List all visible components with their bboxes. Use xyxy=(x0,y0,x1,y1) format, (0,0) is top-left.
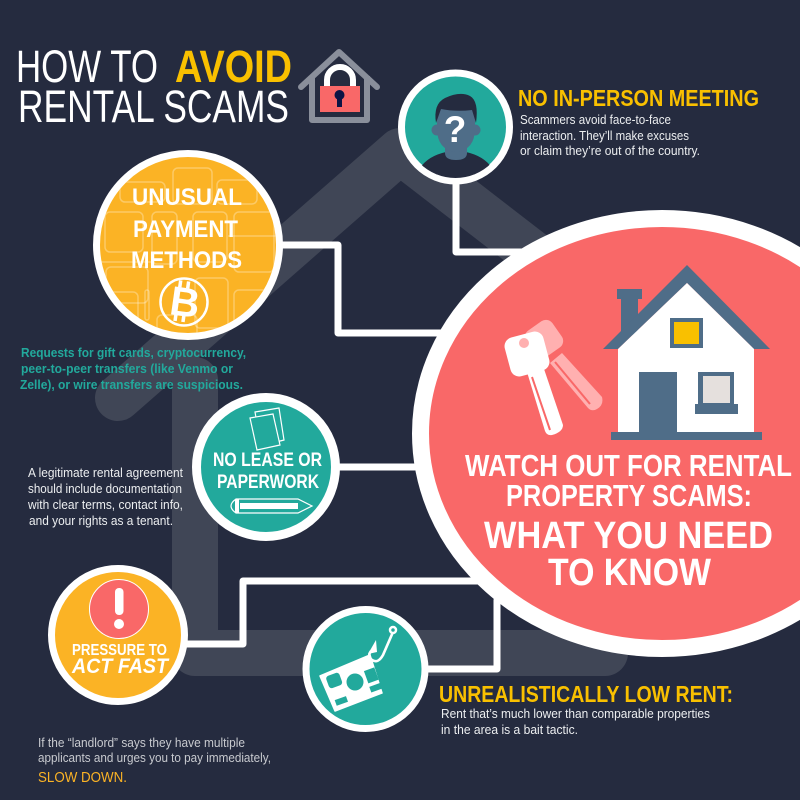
panel: no lease or paperwork xyxy=(27,398,336,536)
panel: unrealistically low rent xyxy=(306,610,733,737)
circle xyxy=(306,610,425,728)
text block xyxy=(38,735,271,786)
text block: A legitimate rental agreement xyxy=(28,465,183,480)
panel: unusual payment methods xyxy=(20,154,280,392)
heading: UNUSUAL xyxy=(132,184,242,211)
heading: PROPERTY SCAMS: xyxy=(506,478,752,513)
heading: TO KNOW xyxy=(548,552,711,594)
text block: Scammers avoid face-to-face xyxy=(520,112,671,127)
circle xyxy=(196,398,336,536)
circle xyxy=(52,568,184,702)
heading: NO LEASE OR xyxy=(213,450,322,471)
icon: pencil xyxy=(231,499,312,513)
title xyxy=(16,41,292,132)
circle with circuit pattern xyxy=(88,154,280,345)
heading xyxy=(465,448,792,594)
text block xyxy=(520,112,700,158)
text block: Rent that’s much lower than comparable properties xyxy=(441,706,710,721)
panel: no in-person meeting xyxy=(402,73,759,190)
title: HOW TO xyxy=(16,41,158,92)
icon: anonymous person xyxy=(402,73,510,190)
panel: pressure to act fast xyxy=(38,568,271,786)
heading: UNREALISTICALLY LOW RENT: xyxy=(439,681,733,707)
text block: in the area is a bait tactic. xyxy=(441,722,578,737)
title: RENTAL SCAMS xyxy=(18,81,289,132)
heading xyxy=(213,450,322,493)
icon: anonymous person: ? xyxy=(444,109,466,150)
heading: METHODS xyxy=(131,247,242,274)
text block: peer-to-peer transfers (like Venmo or xyxy=(21,361,233,376)
icon: paper sheets xyxy=(250,408,284,450)
icon: bitcoin: B xyxy=(167,277,203,327)
heading: ACT FAST xyxy=(71,654,170,678)
heading: PAYMENT xyxy=(133,216,238,243)
heading: PAPERWORK xyxy=(217,472,319,493)
text block: with clear terms, contact info, xyxy=(27,497,183,512)
icon: fish hook with banknote xyxy=(320,627,396,711)
red ellipse xyxy=(420,218,800,648)
heading: NO IN-PERSON MEETING xyxy=(518,85,759,111)
icon: house with padlock xyxy=(301,52,377,120)
text block: If the “landlord” says they have multiple xyxy=(38,735,245,750)
heading xyxy=(71,642,170,678)
ghost house outline xyxy=(118,151,605,653)
text block: Zelle), or wire transfers are suspicious. xyxy=(20,377,243,392)
main circle: watch out for rental property scams xyxy=(420,218,800,648)
title: AVOID xyxy=(175,41,292,92)
icon: keys xyxy=(503,317,602,435)
text block: applicants and urges you to pay immediately, xyxy=(38,750,271,765)
text block: Requests for gift cards, cryptocurrency, xyxy=(21,345,246,360)
text block: SLOW DOWN. xyxy=(38,769,127,786)
text block xyxy=(20,345,246,392)
icon: exclamation mark xyxy=(90,580,148,638)
text block: should include documentation xyxy=(28,481,182,496)
connector lines xyxy=(185,180,540,669)
heading: WHAT YOU NEED xyxy=(484,515,773,557)
heading: PRESSURE TO xyxy=(72,642,167,659)
heading xyxy=(131,184,242,274)
text block: and your rights as a tenant. xyxy=(29,513,173,528)
text block: interaction. They’ll make excuses xyxy=(520,128,689,143)
text block xyxy=(441,706,710,737)
icon: house xyxy=(603,265,770,440)
text block xyxy=(27,465,183,528)
text block: or claim they’re out of the country. xyxy=(520,143,700,158)
